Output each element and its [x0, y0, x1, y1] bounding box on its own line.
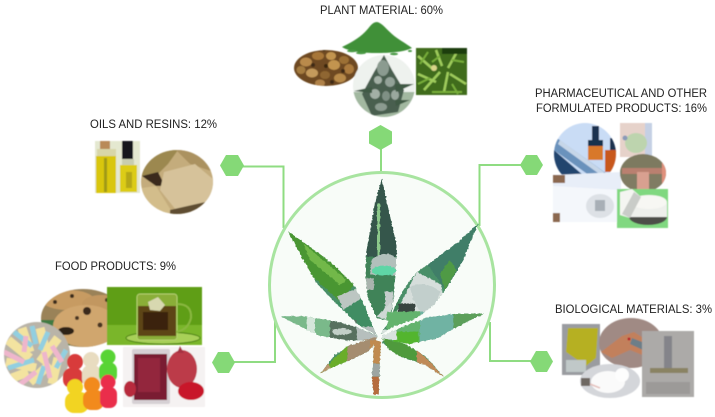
photo: glass of tea [107, 287, 202, 345]
photo: resin chunks [140, 149, 214, 216]
photo: oil bottles [95, 141, 140, 193]
orange bear [83, 377, 104, 410]
red bear [63, 354, 83, 388]
right middle leaflet artwork [382, 312, 485, 345]
photo: green leaves [416, 48, 467, 95]
pink bear [100, 374, 117, 408]
heading: oils and resins: OILS AND RESINS: 12% [90, 119, 217, 131]
yellow bear [65, 379, 89, 413]
hexagon: food products [212, 352, 235, 373]
photo: pomegranate juice [123, 346, 205, 407]
left middle leaflet artwork [280, 313, 378, 342]
green bear [99, 350, 117, 383]
heading: food products: FOOD PRODUCTS: 9% [55, 261, 176, 273]
hexagon: biological materials [530, 351, 553, 372]
central circle [270, 172, 494, 398]
photo: marshmallows [3, 322, 71, 388]
image group: plant material [292, 22, 467, 118]
heading: plant material: PLANT MATERIAL: 60% [320, 5, 443, 17]
connector lines [232, 148, 535, 362]
top leaflet artwork [363, 177, 400, 322]
photo: cream jar [617, 189, 668, 228]
cannabis leaf collage [280, 177, 487, 397]
image group: food products [3, 287, 205, 413]
photo: gummy bears [63, 350, 117, 413]
photo: white lab rat [580, 364, 640, 398]
hexagon: pharmaceutical [520, 155, 543, 175]
photo: lab beaker [642, 331, 694, 397]
photo: yellow tissue sample [562, 324, 600, 375]
upper left leaflet artwork [285, 228, 378, 338]
photo: cannabis bud [353, 54, 415, 118]
image group: biological materials [562, 318, 694, 398]
photo: skin patch [620, 123, 652, 157]
heading: pharmaceutical and other formulated products: PHARMACEUTICAL AND OTHER [535, 88, 707, 100]
heading: pharmaceutical and other formulated products: FORMULATED PRODUCTS: 16% [536, 103, 707, 115]
bottom leaflet artwork [370, 340, 382, 397]
upper right leaflet artwork [385, 220, 482, 335]
photo: dried seeds [292, 48, 360, 88]
photo: green powder [342, 22, 412, 55]
image group: oils and resins [95, 141, 214, 216]
photo: dropper bottles and vape pens [553, 122, 617, 176]
hexagon: oils and resins [220, 155, 244, 176]
lower left leaflet artwork [318, 337, 378, 375]
lower right leaflet artwork [382, 338, 444, 377]
cream bear [82, 352, 101, 387]
heading: biological materials: BIOLOGICAL MATERIALS: 3% [555, 304, 712, 316]
hexagon: plant material [369, 125, 392, 150]
photo: cookies [40, 288, 108, 348]
photo: tube [553, 172, 621, 222]
photo: face mask [620, 154, 667, 190]
photo: dissected tissue [598, 318, 664, 368]
heading: pharmaceutical and other formulated products [535, 88, 707, 115]
image group: pharmaceutical and other formulated products [553, 123, 668, 228]
